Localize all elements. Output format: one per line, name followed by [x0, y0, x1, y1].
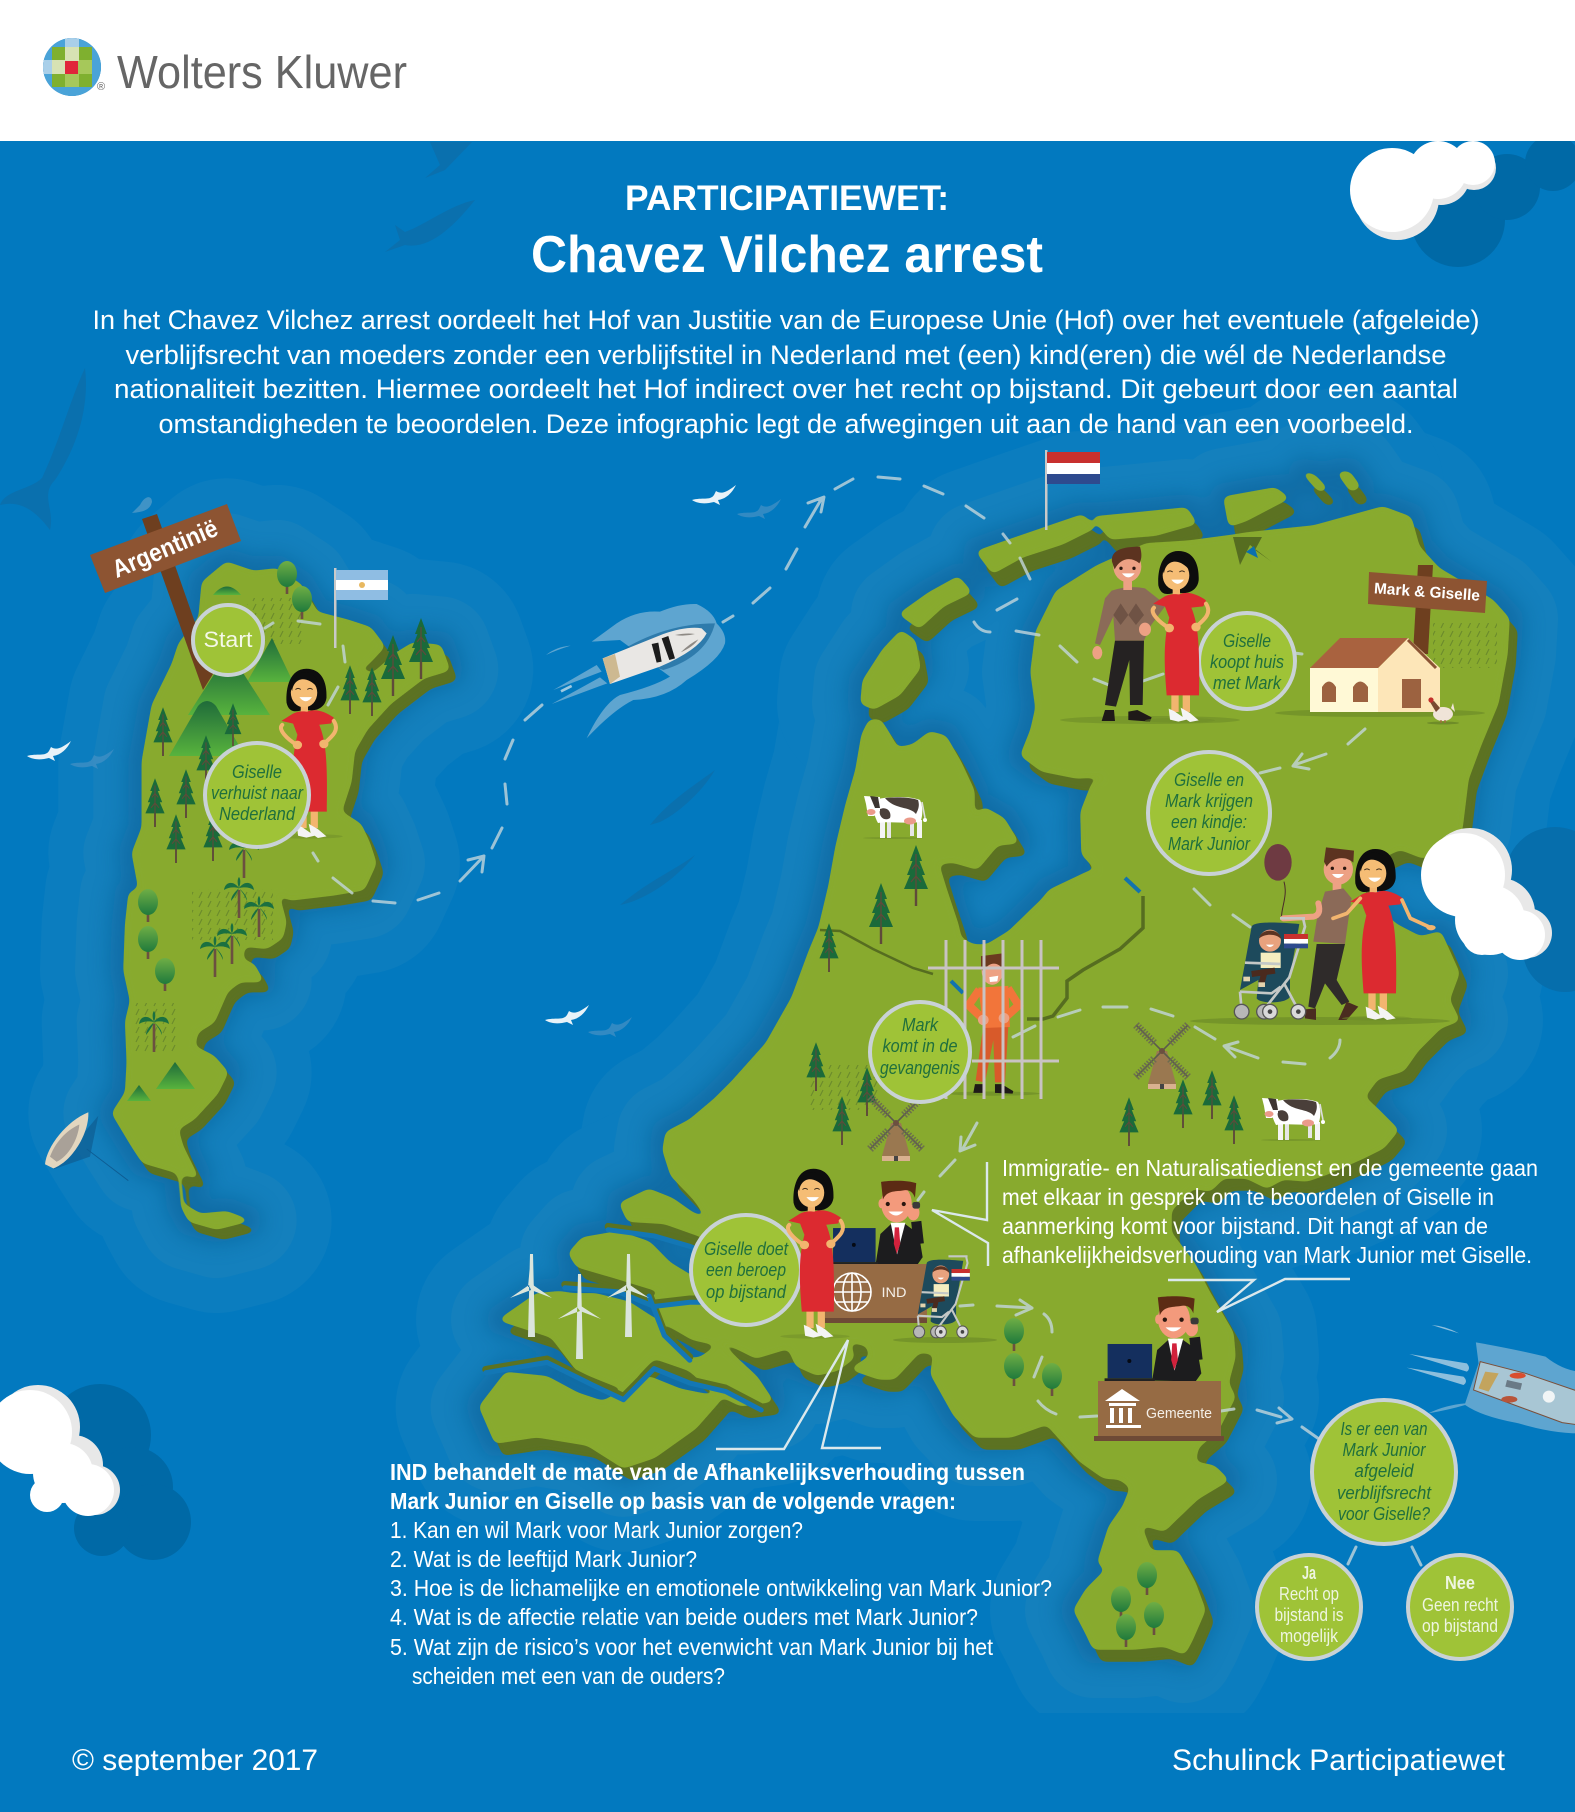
- circle: Giselle doet een beroep op bijstand: op bijstand: [706, 1281, 787, 1302]
- circle: Giselle verhuist naar Nederland: Nederland: [219, 803, 296, 824]
- logo: Wolters Kluwer: ®: [97, 81, 105, 93]
- circle: Giselle en Mark krijgen een kindje: een kindje:: [1171, 811, 1247, 832]
- text: IND questions: 1. Kan en wil Mark voor Mark Junior zorgen?: [390, 1517, 803, 1543]
- circle: Giselle en Mark krijgen een kindje: [1148, 752, 1270, 874]
- cloud: bottom left: [0, 1385, 120, 1516]
- text: Immigratie- en Naturalisatiedienst: Immigratie- en Naturalisatiedienst en de gemeente gaan: [1002, 1155, 1538, 1181]
- circle: Giselle en Mark krijgen een kindje: Mark krijgen: [1165, 790, 1253, 811]
- circle: Giselle doet een beroep op bijstand: Giselle doet: [704, 1238, 789, 1259]
- wind turbines: [510, 1254, 649, 1359]
- route: dashed path: [265, 477, 1421, 1565]
- text: IND questions: 3. Hoe is de lichamelijke en emotionele ontwikkeling van Mark Junior?: [390, 1575, 1052, 1601]
- character: Giselle with Mark: [1145, 551, 1215, 723]
- title: PARTICIPATIEWET:: [625, 179, 949, 218]
- map: Argentina: [113, 563, 448, 1228]
- circle: Mark komt in de gevangenis: [870, 1002, 970, 1102]
- cloud: right: [1421, 828, 1552, 960]
- family: Mark, Mark Junior and Giselle: [1190, 844, 1450, 1025]
- logo: Wolters Kluwer: Wolters Kluwer: [117, 46, 407, 98]
- circle: Ja: bijstand is: [1274, 1605, 1344, 1625]
- circle: question about derived residence right: [1312, 1400, 1456, 1544]
- circle: Giselle doet een beroep op bijstand: [691, 1215, 801, 1325]
- text: IND questions: 5. Wat zijn de risico’s voor het evenwicht van Mark Junior bij het: [390, 1634, 994, 1660]
- text: IND questions: [390, 1459, 1052, 1689]
- text: Immigratie- en Naturalisatiedienst: aanmerking komt voor bijstand. Dit hangt af van de: [1002, 1213, 1488, 1239]
- right cloud shadow: [1505, 827, 1575, 992]
- chicken: [1427, 697, 1459, 724]
- text: Immigratie- en Naturalisatiedienst: [1002, 1155, 1538, 1268]
- circle: Nee: Nee: [1445, 1573, 1475, 1593]
- circle: Mark komt in de gevangenis: Mark: [902, 1014, 940, 1035]
- birds: [27, 485, 781, 1037]
- house: [1275, 638, 1485, 717]
- title: Chavez Vilchez arrest: [531, 226, 1043, 284]
- sign: Mark & Giselle: Mark & Giselle: [1374, 580, 1481, 605]
- stroller at IND: [893, 1256, 997, 1343]
- circle: question about derived residence right: afgeleid: [1354, 1460, 1414, 1481]
- circle: Giselle doet een beroep op bijstand: een beroep: [706, 1259, 786, 1280]
- circle: Nee: Geen recht: [1422, 1595, 1498, 1615]
- header band: [0, 0, 1575, 141]
- circle: Giselle koopt huis met Mark: koopt huis: [1210, 651, 1284, 672]
- circle: Giselle en Mark krijgen een kindje: Giselle en: [1174, 769, 1244, 790]
- circle: question about derived residence right: voor Giselle?: [1338, 1503, 1431, 1524]
- circle: Giselle koopt huis met Mark: [1199, 613, 1295, 709]
- character: Mark in prison: [947, 953, 1040, 1096]
- character: Mark in sweater: [1060, 547, 1240, 724]
- circle: Mark komt in de gevangenis: komt in de: [882, 1035, 958, 1056]
- text: IND questions: scheiden met een van de ouders?: [412, 1663, 725, 1689]
- coastal water halos: [113, 473, 1508, 1653]
- trees: round: [138, 561, 1164, 1647]
- title: [531, 179, 1043, 284]
- speedboat: [546, 604, 725, 738]
- character: Giselle in Argentina: [273, 669, 343, 839]
- character: Giselle at IND: [780, 1169, 850, 1339]
- coastal shadow: [113, 473, 1508, 1653]
- land relief sides: [120, 487, 1516, 1665]
- intro text: omstandigheden te beoordelen. Deze infographic legt de afwegingen uit aan de hand van een voorbeeld.: [158, 409, 1414, 439]
- text: Immigratie- en Naturalisatiedienst: afhankelijkheidsverhouding van Mark Junior met Giselle.: [1002, 1242, 1532, 1268]
- character: municipal officer: [1105, 1296, 1201, 1381]
- prison bars: [928, 940, 1059, 1099]
- character: IND officer: [830, 1181, 923, 1265]
- text: IND questions: IND behandelt de mate van de Afhankelijksverhouding tussen: [390, 1459, 1025, 1485]
- circle: question about derived residence right: Is er een van: [1340, 1418, 1428, 1439]
- circle: Giselle verhuist naar Nederland: Giselle: [232, 761, 282, 782]
- trees: palms: [139, 837, 274, 1052]
- flag: Argentina: [334, 568, 388, 648]
- callout lines: [716, 1162, 1350, 1449]
- circle: Ja: [1257, 1555, 1361, 1659]
- text: IND questions: Mark Junior en Giselle op basis van de volgende vragen:: [390, 1488, 956, 1514]
- sign: Argentinië: Argentinië: [108, 514, 222, 584]
- footer: copyright: © september 2017: [72, 1744, 318, 1777]
- circle: Giselle koopt huis met Mark: met Mark: [1213, 672, 1283, 693]
- Zeeland water channels: [486, 1226, 761, 1410]
- circle: Nee: [1408, 1555, 1512, 1659]
- trees: pines: [145, 618, 1244, 1146]
- intro text: verblijfsrecht van moeders zonder een verblijfstitel in Nederland met (een) kind(eren) die wél de Nederlandse: [126, 340, 1446, 370]
- map: the Netherlands: [481, 473, 1508, 1653]
- sea animal silhouettes: [0, 142, 715, 905]
- sign: Mark & Giselle: [1368, 565, 1487, 654]
- sign: Argentinië: [90, 497, 241, 690]
- logo: Wolters Kluwer: [43, 38, 406, 96]
- flag: the Netherlands: [1045, 450, 1100, 530]
- circle: Start: Start: [204, 627, 252, 652]
- intro text: nationaliteit bezitten. Hiermee oordeelt het Hof indirect over het recht op bijstand. Dit gebeurt door een aantal: [114, 374, 1458, 404]
- desk: IND: IND: [882, 1284, 906, 1300]
- ship: [1407, 1325, 1575, 1433]
- windmills: [870, 1025, 1188, 1161]
- footer: source: Schulinck Participatiewet: [1172, 1744, 1506, 1777]
- circle: Nee: op bijstand: [1422, 1616, 1498, 1636]
- cows: [863, 796, 1325, 1141]
- circle: Ja: mogelijk: [1280, 1626, 1339, 1646]
- circle: Mark komt in de gevangenis: gevangenis: [880, 1057, 960, 1078]
- text: Immigratie- en Naturalisatiedienst: met elkaar in gesprek om te beoordelen of Giselle in: [1002, 1184, 1494, 1210]
- desk: Gemeente: [1094, 1381, 1224, 1441]
- circle: Ja: Ja: [1302, 1563, 1317, 1583]
- circle: Ja: Recht op: [1279, 1584, 1339, 1604]
- rivers and inlets: [820, 537, 1272, 1019]
- circle: question about derived residence right: verblijfsrecht: [1337, 1482, 1432, 1503]
- intro text: [92, 305, 1480, 439]
- circle: Giselle en Mark krijgen een kindje: Mark Junior: [1168, 833, 1251, 854]
- cloud: top right: [1350, 141, 1496, 240]
- circle: question about derived residence right: Mark Junior: [1342, 1439, 1426, 1460]
- small boat: [45, 1112, 128, 1181]
- intro text: In het Chavez Vilchez arrest oordeelt het Hof van Justitie van de Europese Unie (Hof) over het eventuele (afgeleide): [92, 305, 1480, 335]
- circle: Giselle verhuist naar Nederland: [205, 743, 309, 847]
- desk: Gemeente: Gemeente: [1146, 1406, 1212, 1422]
- text: IND questions: 2. Wat is de leeftijd Mark Junior?: [390, 1546, 697, 1572]
- circle: Giselle verhuist naar Nederland: verhuist naar: [211, 782, 304, 803]
- mountains: [127, 586, 293, 1101]
- hatched fields: [133, 598, 1497, 1110]
- circle: Start: [193, 605, 263, 675]
- cloud shadows: [49, 135, 1575, 1560]
- desk: IND: [825, 1264, 927, 1323]
- text: IND questions: 4. Wat is de affectie relatie van beide ouders met Mark Junior?: [390, 1604, 978, 1630]
- circle: Giselle koopt huis met Mark: Giselle: [1223, 630, 1271, 651]
